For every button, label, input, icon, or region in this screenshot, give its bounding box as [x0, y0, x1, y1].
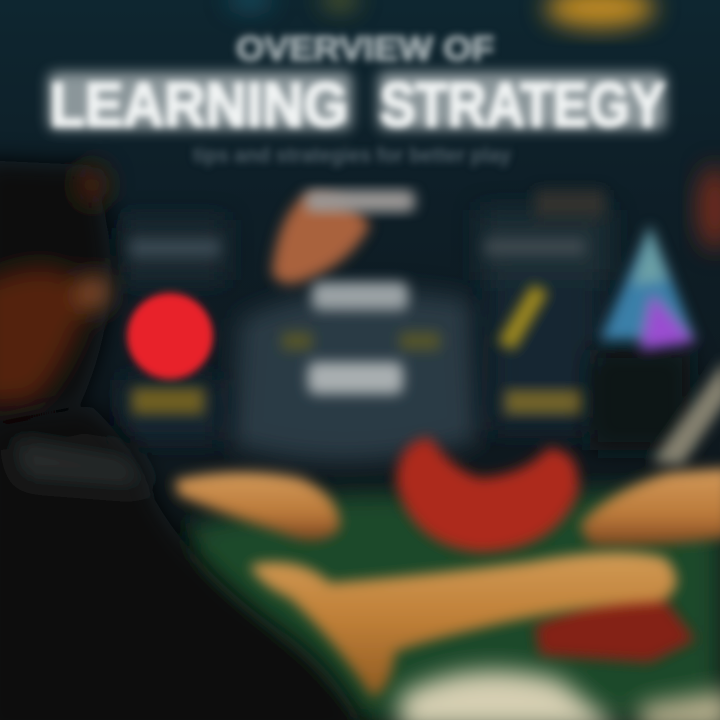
right hand upper	[580, 468, 720, 546]
face	[0, 165, 109, 405]
central panel	[232, 291, 478, 461]
red object top right	[697, 166, 720, 250]
table surface	[190, 490, 720, 720]
left arm hand	[175, 472, 340, 540]
dark block right	[590, 350, 690, 450]
red circle	[127, 293, 213, 379]
side panels	[120, 210, 610, 440]
pencil	[652, 360, 720, 465]
title text: LEARNING	[50, 71, 348, 140]
shoulder highlight	[10, 435, 150, 490]
top decorative lights	[228, 0, 655, 28]
central labels	[282, 282, 440, 394]
raised hand	[272, 194, 370, 284]
panel captions	[130, 190, 605, 256]
title text	[50, 71, 665, 140]
cream paper	[400, 670, 720, 720]
triangle icon	[600, 225, 695, 350]
red glove	[396, 438, 578, 552]
small heading: OVERVIEW OF	[236, 30, 494, 68]
subtitle: tips and strategies for better play	[193, 144, 511, 167]
gold pencil icon	[498, 285, 548, 350]
title	[48, 72, 666, 130]
gold label right	[505, 390, 583, 414]
lower arm and hand	[250, 552, 676, 697]
head dark hair	[0, 160, 111, 425]
gold label	[132, 388, 204, 414]
central heading	[305, 190, 415, 212]
person silhouette	[0, 405, 370, 720]
title text: STRATEGY	[380, 71, 665, 140]
red pieces lower right	[535, 580, 695, 662]
